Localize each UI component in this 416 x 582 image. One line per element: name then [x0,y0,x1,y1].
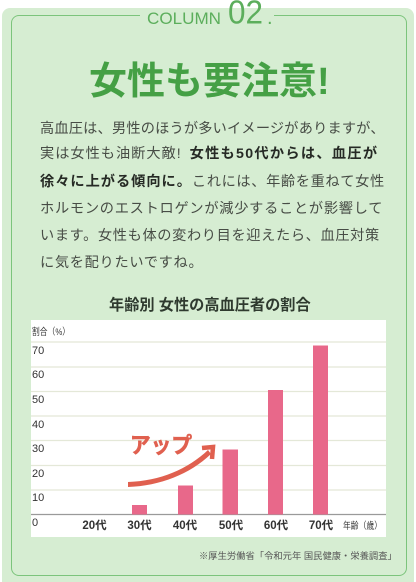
y axis labels [32,326,70,529]
body text: ホルモンのエストロゲンが減少することが影響して [40,201,383,217]
bars [132,346,328,514]
column heading [140,0,274,30]
y axis labels: 0 [32,517,38,529]
body text: 徐々に上がる傾向に。これには、年齢を重ねて女性 [40,174,385,190]
y axis labels: 10 [32,492,44,504]
body text: います。女性も体の変わり目を迎えたら、血圧対策 [40,228,380,244]
column heading: COLUMN [147,9,221,28]
x axis labels: 70代 [309,519,334,532]
y axis labels: 40 [32,419,44,431]
x axis labels: 40代 [173,519,198,532]
chart title: 年齢別 女性の高血圧者の割合 [109,297,311,314]
bar chart [31,320,386,537]
x axis labels: 20代 [82,519,107,532]
y axis labels: 50 [32,394,44,406]
x axis labels: 50代 [219,519,244,532]
y axis labels: 割合（%） [32,326,70,338]
callout: up arrow: アップ [130,433,192,458]
y axis labels: 70 [32,345,44,357]
body text: 実は女性も油断大敵! 女性も50代からは、血圧が [40,146,378,162]
callout: up arrow [128,433,213,487]
body text: 高血圧は、男性のほうが多いイメージがありますが、 [40,121,385,137]
column heading: . [267,7,273,29]
y axis labels: 20 [32,468,44,480]
x axis labels: 60代 [264,519,289,532]
y axis labels: 30 [32,443,44,455]
title: 女性も要注意! [89,61,330,103]
source note: ※厚生労働省「令和元年 国民健康・栄養調査」 [199,551,397,561]
x axis labels: 30代 [127,519,152,532]
x axis labels [82,519,382,532]
y axis labels: 60 [32,369,44,381]
body text: に気を配りたいですね。 [40,255,203,271]
body text [40,120,385,271]
